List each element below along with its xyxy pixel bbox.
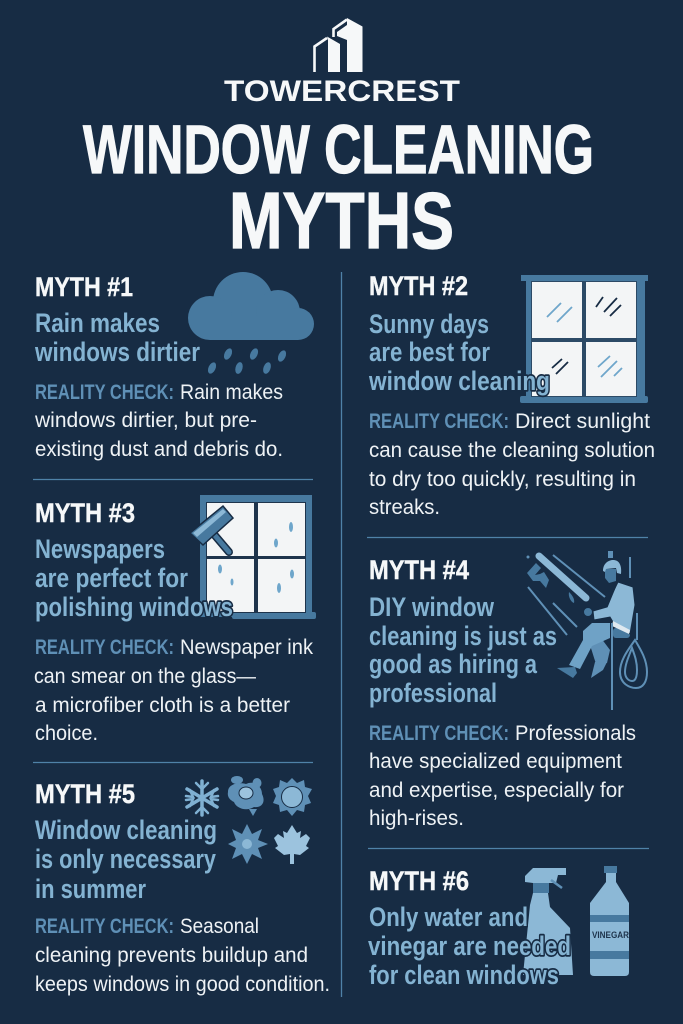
panel: myth 1 <box>34 272 314 461</box>
reality check: can smear on the glass— <box>34 665 256 688</box>
reality check: Rain makes <box>180 381 283 404</box>
reality check: cleaning prevents buildup and <box>35 944 308 967</box>
reality check: REALITY CHECK: <box>35 636 174 659</box>
myth statement <box>369 592 557 708</box>
myth statement: Window cleaning <box>35 815 217 845</box>
panel: myth 5 <box>35 776 330 996</box>
reality check <box>34 381 283 461</box>
reality check: streaks. <box>369 496 440 519</box>
myth statement: are best for <box>369 337 490 367</box>
panel: myth 2 <box>368 271 655 519</box>
reality check: high-rises. <box>369 807 464 830</box>
reality check: keeps windows in good condition. <box>35 973 330 996</box>
myth statement: windows dirtier <box>34 337 200 367</box>
row divider left 1 <box>33 478 313 480</box>
myth statement <box>35 815 217 904</box>
icon: towers <box>314 18 362 72</box>
icon: four seasons <box>186 776 312 864</box>
myth statement: Sunny days <box>369 309 489 339</box>
reality check: Professionals <box>515 722 636 745</box>
reality check: Seasonal <box>180 915 259 938</box>
heading: MYTH #6 <box>369 866 469 896</box>
reality check: windows dirtier, but pre- <box>34 409 257 432</box>
myth statement: DIY window <box>369 592 495 622</box>
heading: MYTH #3 <box>35 498 135 528</box>
reality check: REALITY CHECK: <box>35 381 174 404</box>
myth statement: polishing windows <box>35 592 233 622</box>
icon: rain cloud <box>188 272 314 375</box>
reality check: existing dust and debris do. <box>35 438 283 461</box>
reality check: choice. <box>35 722 98 745</box>
icon: vinegar bottle <box>590 866 629 976</box>
logo: Towercrest <box>224 18 460 108</box>
reality check <box>35 915 330 996</box>
panel: myth 3 <box>34 495 316 745</box>
myth statement: Newspapers <box>35 534 165 564</box>
myth statement: Only water and <box>369 902 528 932</box>
row divider right 1 <box>367 536 648 538</box>
legs <box>590 638 610 664</box>
heading: MYTH #1 <box>35 272 133 302</box>
title <box>83 111 594 265</box>
myth statement <box>35 534 233 622</box>
heading: MYTH #4 <box>369 555 469 585</box>
myth statement: good as hiring a <box>369 649 538 679</box>
row divider left 2 <box>33 762 313 764</box>
column divider <box>340 272 342 997</box>
reality check: Newspaper ink <box>180 636 313 659</box>
heading: MYTH #5 <box>35 779 135 809</box>
icon: vinegar bottle: VINEGAR <box>592 930 629 940</box>
icon: window with streaks <box>520 275 648 403</box>
myth statement: for clean windows <box>369 960 559 990</box>
icon: rope-access window cleaner <box>526 551 647 710</box>
reality check: REALITY CHECK: <box>35 915 174 938</box>
torso <box>593 582 635 634</box>
myth statement: is only necessary <box>35 844 216 874</box>
myth statement: are perfect for <box>35 563 188 593</box>
title: MYTHS <box>229 176 454 265</box>
reality check: REALITY CHECK: <box>369 410 509 433</box>
icon: spray bottle <box>523 868 573 975</box>
myth statement: window cleaning <box>368 366 550 396</box>
reality check <box>369 722 636 830</box>
myth statement: Rain makes <box>35 308 160 338</box>
reality check <box>34 636 313 745</box>
reality check: can cause the cleaning solution <box>369 439 655 462</box>
myth statement <box>34 308 200 367</box>
panel: myth 6 <box>368 866 629 990</box>
myth statement: cleaning is just as <box>369 621 557 651</box>
myth statement: vinegar are needed <box>368 931 571 961</box>
reality check <box>369 410 655 519</box>
row divider right 2 <box>368 848 649 850</box>
reality check: REALITY CHECK: <box>369 722 509 745</box>
myth statement: in summer <box>35 874 146 904</box>
heading: MYTH #2 <box>369 271 468 301</box>
myth statement <box>368 902 571 990</box>
head <box>608 551 613 558</box>
reality check: and expertise, especially for <box>369 779 624 802</box>
reality check: a microfiber cloth is a better <box>35 694 290 717</box>
myth statement: professional <box>369 678 497 708</box>
reality check: Direct sunlight <box>515 410 650 433</box>
panel: myth 4 <box>369 551 647 830</box>
icon: window with squeegee <box>190 495 316 619</box>
reality check: to dry too quickly, resulting in <box>369 468 636 491</box>
myth statement <box>368 309 550 396</box>
brand name: TOWERCREST <box>224 75 460 108</box>
reality check: have specialized equipment <box>369 750 622 773</box>
